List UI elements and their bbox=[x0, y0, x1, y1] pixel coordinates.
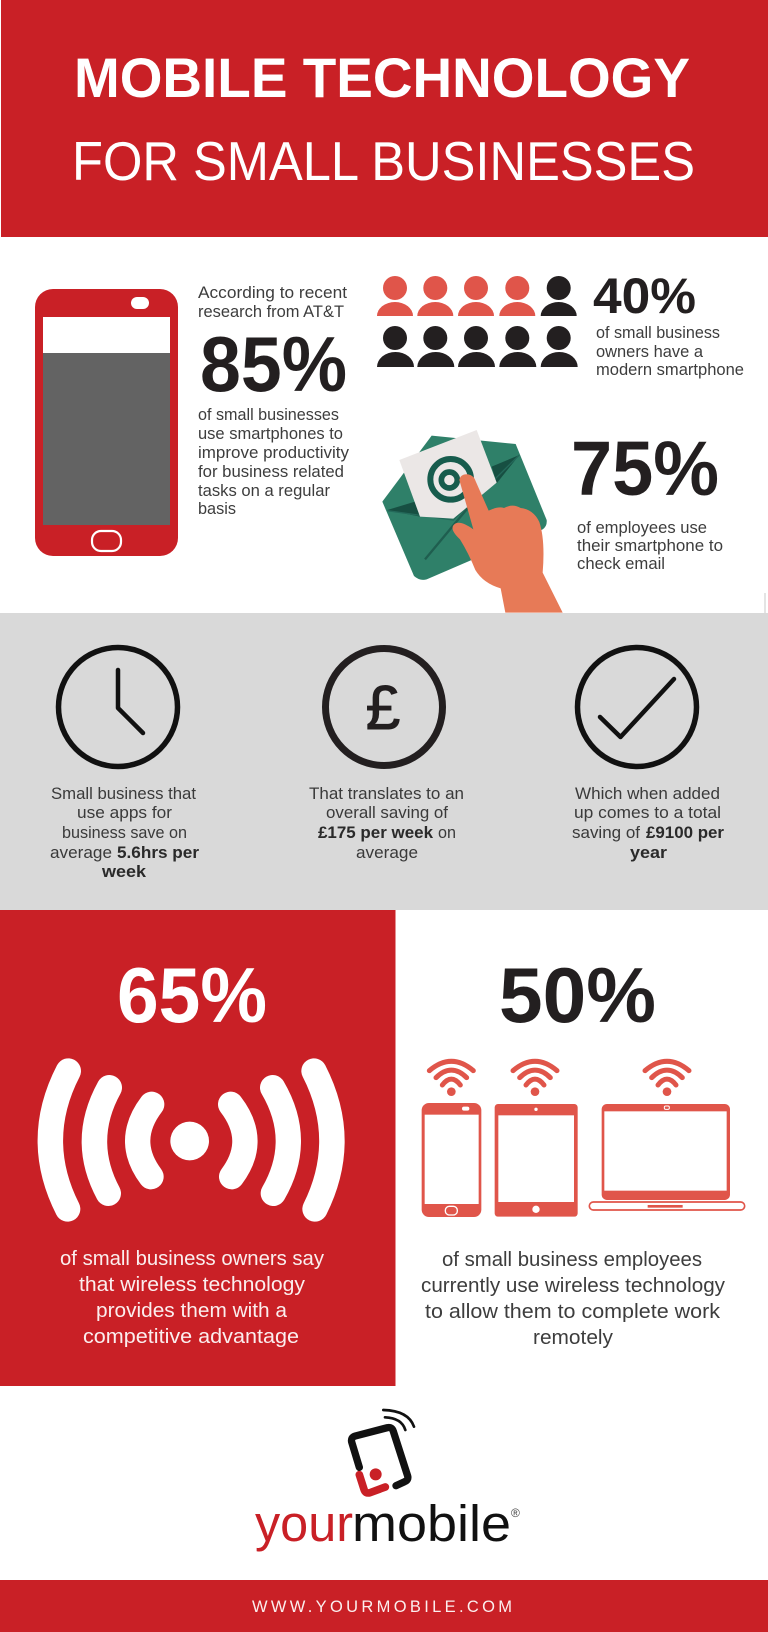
text: 65 percent caption: of small business owners say bbox=[60, 1248, 324, 1270]
stat: 65 percent: 65% bbox=[117, 951, 267, 1039]
text: time saved bbox=[50, 785, 200, 881]
stat: 40 percent: 40% bbox=[593, 268, 696, 324]
icon: red smartphone bbox=[35, 289, 178, 556]
stat: 85 percent of small businesses: of small businesses bbox=[198, 405, 339, 424]
text: yearly saving: up comes to a total bbox=[574, 804, 721, 822]
stat: 40 percent: of small business bbox=[596, 323, 720, 342]
icon: people grid, 4 of 10 highlighted bbox=[377, 276, 578, 367]
logo wordmark: your bbox=[255, 1495, 353, 1552]
title line 1: MOBILE TECHNOLOGY bbox=[74, 46, 690, 109]
icon: pound coin: £ bbox=[366, 674, 400, 743]
text: weekly saving bbox=[309, 785, 464, 862]
icon: envelope with hand bbox=[382, 430, 563, 613]
text: yearly saving bbox=[572, 785, 725, 862]
text: time saved: week bbox=[101, 863, 147, 881]
icon: check mark bbox=[578, 648, 696, 766]
header banner bbox=[1, 0, 768, 237]
logo: yourmobile bbox=[255, 1410, 520, 1552]
text: 65 percent caption bbox=[60, 1248, 324, 1348]
text: weekly saving: £175 per week bbox=[318, 824, 434, 842]
icon: pound coin bbox=[326, 648, 442, 766]
stat: 85 percent of small businesses: 85% bbox=[200, 320, 347, 408]
panel: 65 percent wireless advantage bbox=[0, 910, 396, 1386]
text: 50 percent caption: currently use wireless technology bbox=[421, 1275, 725, 1297]
stat: 50 percent: 50% bbox=[499, 951, 656, 1039]
stat: 85 percent of small businesses: for business related bbox=[198, 462, 344, 481]
text: 65 percent caption: provides them with a bbox=[96, 1300, 288, 1322]
icon: logo phone bbox=[351, 1410, 414, 1493]
text: weekly saving: That translates to an bbox=[309, 785, 464, 803]
footer banner: WWW.YOURMOBILE.COM bbox=[252, 1598, 512, 1616]
stat: 85 percent of small businesses: use smartphones to bbox=[198, 424, 343, 443]
stat: 75 percent: their smartphone to bbox=[577, 536, 723, 555]
text: yearly saving: saving of bbox=[572, 824, 640, 842]
stat: 75 percent: 75% bbox=[571, 426, 719, 512]
icon: clock bbox=[58, 648, 178, 766]
text: time saved: business save on bbox=[62, 824, 187, 842]
stat: 75 percent: check email bbox=[577, 554, 665, 573]
title line 2: FOR SMALL BUSINESSES bbox=[72, 130, 695, 192]
stat: 40 percent: modern smartphone bbox=[596, 360, 744, 379]
logo: yourmobile: ® bbox=[511, 1506, 520, 1520]
text: weekly saving: overall saving of bbox=[326, 804, 448, 822]
stat: 85 percent of small businesses: tasks on a regular bbox=[198, 481, 330, 500]
footer banner bbox=[0, 1580, 768, 1632]
stat: 40 percent: owners have a bbox=[596, 342, 704, 361]
text: 50 percent caption bbox=[421, 1249, 725, 1349]
stat: 85 percent of small businesses: improve productivity bbox=[198, 443, 349, 462]
stat: 85 percent of small businesses bbox=[198, 283, 349, 518]
text: time saved: average bbox=[50, 844, 112, 862]
text: 65 percent caption: that wireless technology bbox=[79, 1274, 305, 1296]
stat: 75 percent bbox=[571, 426, 723, 573]
text: 50 percent caption: of small business employees bbox=[442, 1249, 702, 1271]
text: yearly saving: Which when added bbox=[575, 785, 720, 803]
logo: yourmobile: mobile bbox=[352, 1495, 511, 1552]
text: time saved: Small business that bbox=[51, 785, 196, 803]
text: 50 percent caption: remotely bbox=[533, 1327, 613, 1349]
text: time saved: 5.6hrs per bbox=[117, 844, 200, 862]
panel: savings band bbox=[0, 613, 768, 910]
text: weekly saving: average bbox=[356, 844, 418, 862]
icon: connected devices bbox=[422, 1061, 745, 1217]
text: yearly saving: year bbox=[630, 844, 668, 862]
icon: wireless signal bbox=[50, 1071, 332, 1209]
stat: 85 percent of small businesses: research from AT&T bbox=[198, 302, 344, 321]
text: weekly saving: on bbox=[438, 824, 456, 842]
stat: 85 percent of small businesses: According to recent bbox=[198, 283, 347, 302]
text: yearly saving: £9100 per bbox=[646, 824, 725, 842]
stat: 85 percent of small businesses: basis bbox=[198, 499, 236, 518]
stat: 40 percent bbox=[593, 268, 744, 379]
text: time saved: use apps for bbox=[77, 804, 173, 822]
text: 65 percent caption: competitive advantage bbox=[83, 1326, 299, 1348]
stat: 75 percent: of employees use bbox=[577, 518, 707, 537]
text: 50 percent caption: to allow them to complete work bbox=[425, 1301, 721, 1323]
